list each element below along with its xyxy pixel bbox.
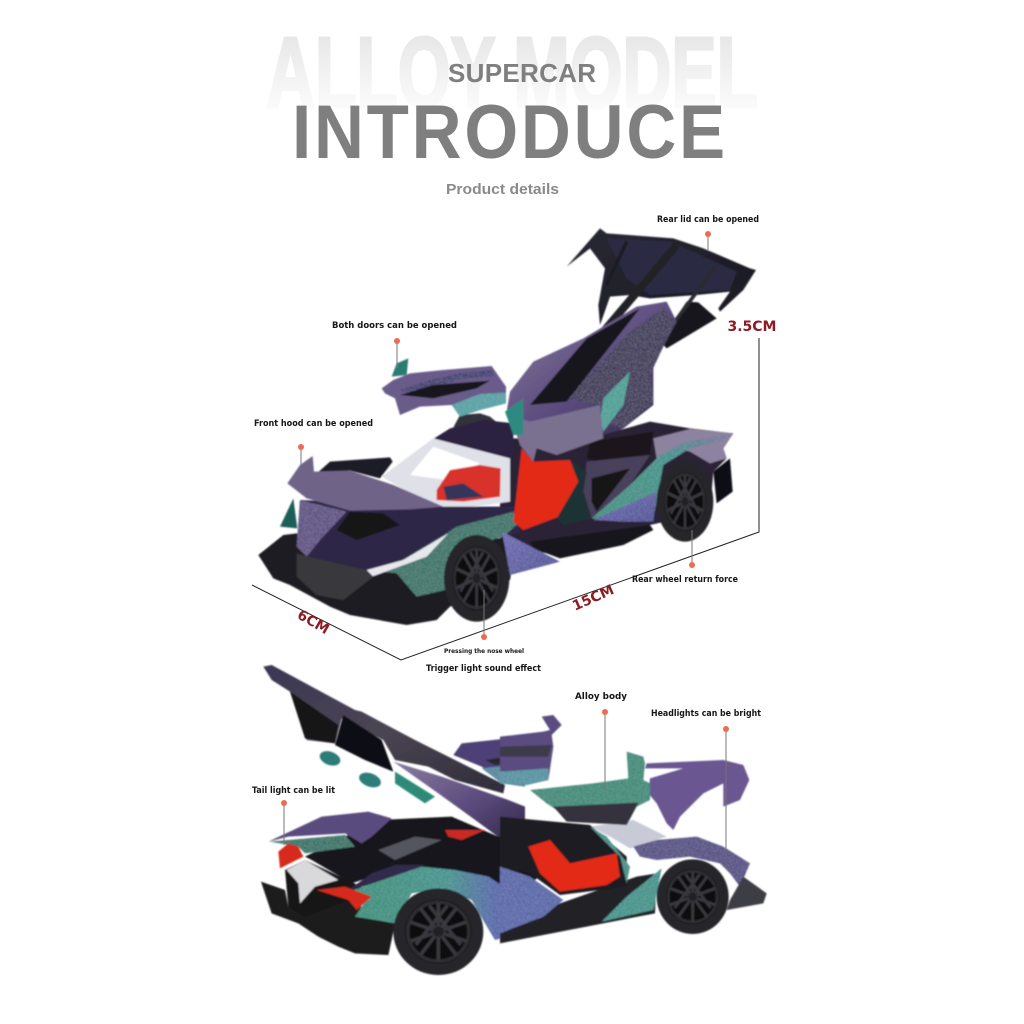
ghost heading: ALLOY MODEL: ALLOY MODEL — [266, 17, 758, 129]
rear half of the car — [507, 228, 756, 438]
callout: nose wheel — [444, 590, 524, 655]
door, opened — [382, 358, 506, 427]
front half — [500, 715, 767, 943]
engine details — [378, 837, 442, 860]
teal pivot — [505, 398, 523, 435]
teal pillar — [590, 827, 630, 883]
red interior — [513, 448, 578, 530]
rear body — [500, 422, 733, 558]
callout: nose wheel: Pressing the nose wheel — [444, 647, 524, 655]
callout: rear wheel — [632, 530, 738, 585]
door body — [382, 366, 506, 417]
rear lid body — [393, 762, 525, 847]
seats — [437, 465, 501, 502]
door 1, opened — [500, 715, 562, 785]
callout: headlights — [651, 709, 761, 850]
door 1 left part — [453, 737, 525, 787]
red stripe — [317, 887, 372, 910]
engine red part — [445, 830, 485, 840]
door recess — [400, 381, 490, 398]
upper dark scoop — [315, 457, 393, 478]
cabin dark — [500, 817, 627, 895]
car: front view with open parts — [258, 228, 756, 625]
teal body — [348, 867, 532, 940]
opened hood — [645, 760, 749, 830]
door pivot — [453, 413, 500, 427]
heading: INTRODUCE: INTRODUCE — [292, 90, 725, 175]
lower dark body — [500, 873, 657, 943]
dimension: 15CM: 15CM — [570, 582, 617, 615]
opened wing — [263, 665, 505, 793]
green fender — [368, 512, 517, 597]
side panel — [583, 455, 650, 518]
bright glass — [410, 447, 480, 480]
dimension: 6CM: 6CM — [294, 607, 332, 638]
callout: headlights: Headlights can be bright — [651, 709, 761, 719]
rear half — [261, 665, 542, 975]
callout: hood: Front hood can be opened — [254, 419, 373, 429]
rear body shell — [500, 422, 733, 555]
callout: rear lid: Rear lid can be opened — [657, 215, 759, 225]
car: rear view with open parts — [261, 665, 767, 975]
rear bumper — [713, 458, 733, 503]
rear diffuser — [261, 882, 395, 955]
callout: tail light: Tail light can be lit — [252, 786, 335, 796]
rear lid panel — [507, 302, 677, 438]
dimension lines — [252, 338, 759, 660]
front wheel — [444, 535, 509, 622]
door blue band — [400, 370, 494, 394]
rear dark filler — [285, 860, 395, 955]
face panel — [297, 500, 520, 587]
teal triangle — [602, 868, 662, 922]
door 2, opened — [530, 752, 650, 825]
nose — [727, 877, 767, 910]
tail light — [278, 843, 303, 868]
callout: doors — [332, 321, 457, 368]
red interior — [528, 840, 620, 892]
windshield — [382, 438, 510, 510]
lower dark base — [258, 533, 517, 625]
sill — [530, 525, 653, 558]
lid lower frame — [510, 405, 603, 462]
purple front — [297, 500, 347, 557]
callout: hood — [254, 419, 373, 466]
front fender — [633, 837, 750, 887]
rear deck — [268, 812, 392, 843]
engine bay — [305, 817, 542, 893]
callout: tail light — [252, 786, 335, 845]
blue side triangle — [502, 532, 560, 575]
teal rail — [395, 772, 435, 803]
pillar — [557, 460, 592, 525]
callout: doors: Both doors can be opened — [332, 321, 457, 331]
rear wheel — [657, 462, 713, 542]
rear wheel — [393, 888, 483, 975]
mid section — [502, 398, 603, 575]
callout: alloy body: Alloy body — [575, 692, 627, 702]
front wheel — [657, 859, 729, 934]
door mirror — [392, 358, 408, 377]
teal haunch — [592, 433, 733, 522]
side window — [592, 468, 630, 512]
blue door panel — [500, 867, 563, 933]
deck green trim — [270, 835, 355, 853]
heading: SUPERCAR: SUPERCAR — [448, 58, 596, 88]
haunch top — [348, 865, 425, 890]
engine bay — [337, 512, 400, 540]
cabin glass — [590, 820, 667, 848]
roof — [432, 420, 513, 458]
blue lower panel — [593, 492, 657, 522]
seat shadow — [443, 483, 483, 500]
front half of the car — [258, 420, 520, 625]
engine cover — [587, 432, 653, 465]
callout: trigger: Trigger light sound effect — [426, 664, 541, 674]
hood — [287, 456, 443, 511]
callout: rear wheel: Rear wheel return force — [632, 575, 738, 585]
callout: alloy body — [575, 692, 627, 790]
door teal lower — [452, 393, 506, 417]
rear wing — [550, 228, 756, 395]
silver badge — [287, 860, 338, 903]
white streak — [367, 533, 448, 577]
dimension: 3.5CM: 3.5CM — [727, 319, 777, 335]
callout: rear lid — [657, 215, 759, 250]
left green trim — [280, 498, 297, 528]
subheading: Product details: Product details — [446, 181, 559, 198]
carbon grille — [297, 553, 373, 600]
rear top panel — [653, 429, 733, 463]
